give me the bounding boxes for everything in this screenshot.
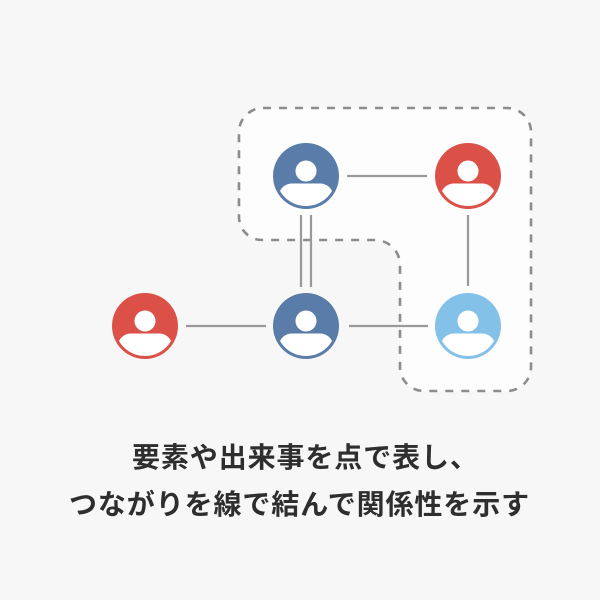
node: red person top right (435, 143, 501, 209)
connector lines (186, 176, 468, 326)
node: blue person center (273, 293, 339, 359)
node: blue person top (273, 143, 339, 209)
node: red person left (112, 293, 178, 359)
node: light blue person right (435, 293, 501, 359)
caption line 1: 要素や出来事を点で表し、 (132, 442, 479, 473)
dashed group outline (239, 108, 531, 391)
caption line 2: つながりを線で結んで関係性を示す (69, 489, 530, 520)
